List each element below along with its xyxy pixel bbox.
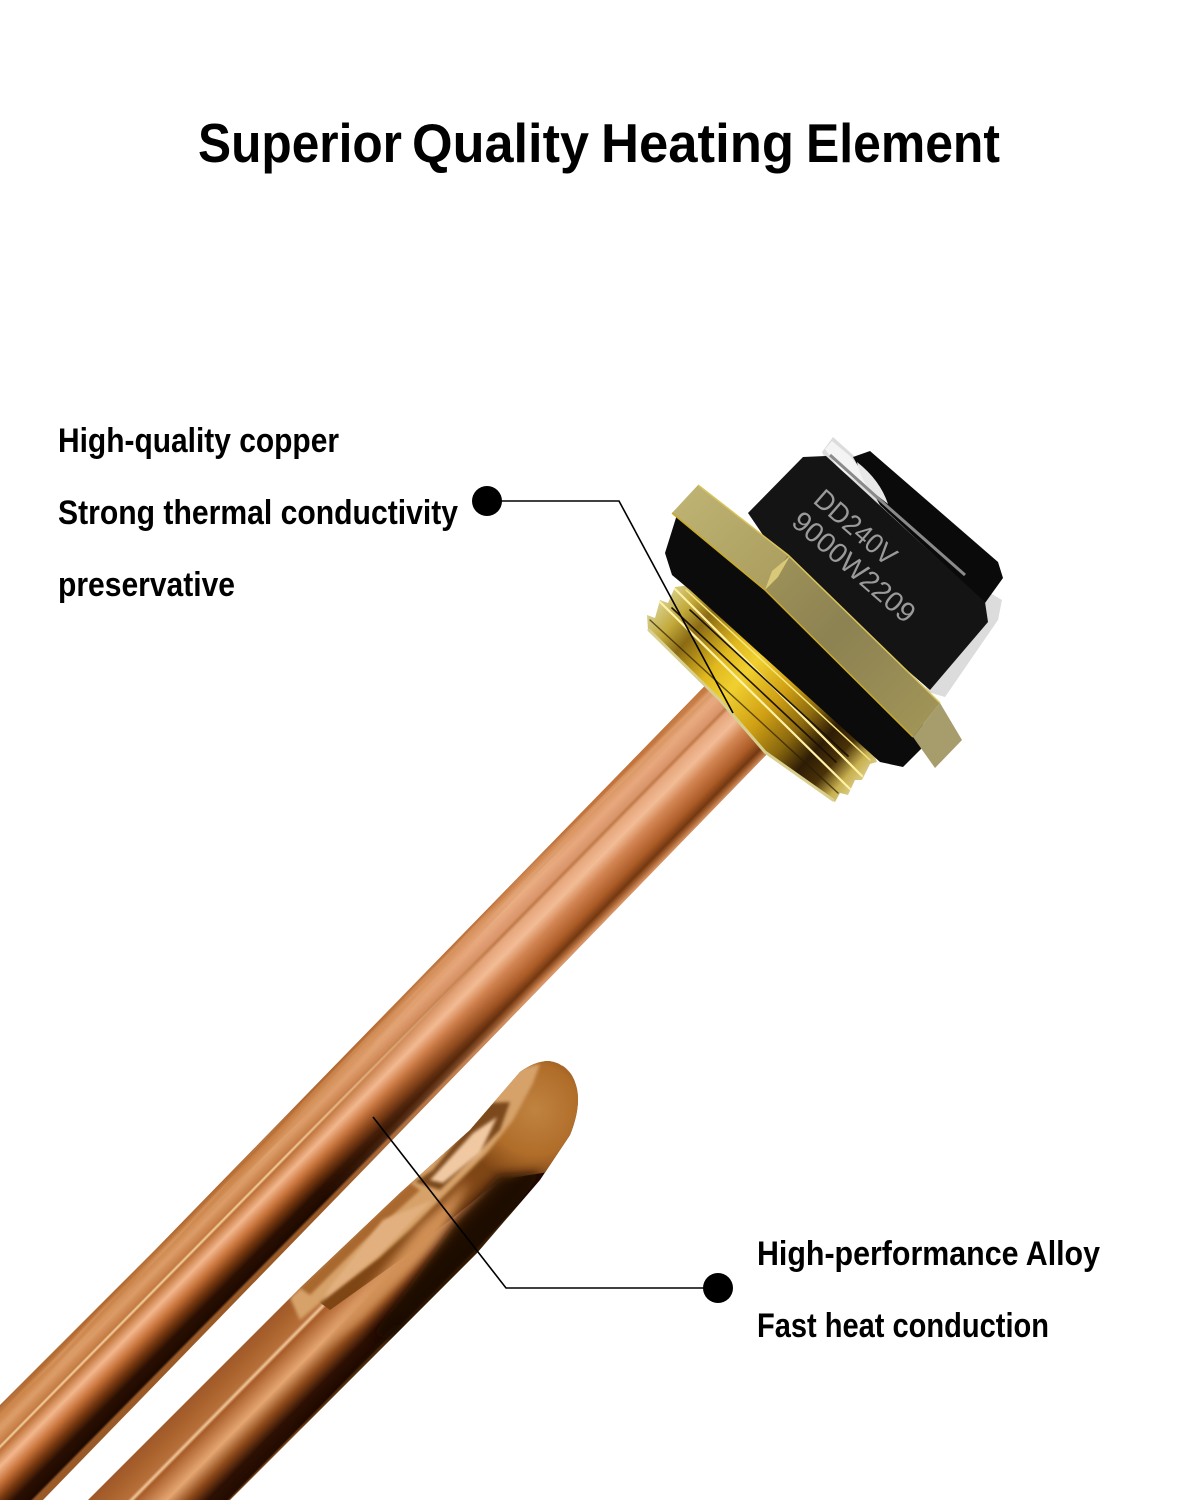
fitting: brass thread	[647, 585, 877, 802]
title	[198, 112, 1000, 174]
fitting: brass hex flange	[672, 485, 962, 768]
black housing	[748, 456, 988, 690]
copper tube: short leg with rounded tip	[88, 1061, 578, 1500]
pale highlight	[430, 1117, 497, 1183]
title: Quality	[412, 112, 589, 174]
title: Element	[806, 112, 1000, 174]
fitting: black terminal housing with silver clips: 9000W2209	[786, 505, 922, 629]
silver clip	[822, 437, 1002, 697]
callout: top leader line and dot	[472, 486, 733, 713]
window in clip	[857, 462, 888, 504]
callout: top label text: High-quality copper	[58, 422, 339, 460]
silver strip between housing and cover	[830, 455, 965, 575]
copper tube: long leg	[0, 686, 766, 1500]
black rear cover	[853, 451, 1003, 603]
callout: bottom label text: High-performance Alloy	[757, 1235, 1100, 1273]
lower light copper band	[336, 1181, 471, 1338]
title: Superior	[198, 112, 402, 174]
callout: bottom label text: Fast heat conduction	[757, 1307, 1049, 1345]
dark underside	[372, 1172, 542, 1340]
fitting: black terminal housing with silver clips	[748, 437, 1003, 697]
fitting: black rubber gasket	[665, 505, 935, 767]
callout: top label text: Strong thermal conductivity	[58, 494, 458, 532]
callout: top label text	[58, 422, 458, 604]
upper rim band	[300, 1183, 420, 1295]
housing text: DD240V	[808, 483, 903, 572]
callout: bottom label text	[757, 1235, 1100, 1345]
callout: bottom leader line and dot	[373, 1117, 733, 1303]
tip cap	[300, 1055, 590, 1310]
title: Heating	[601, 112, 794, 174]
inner dark lobe	[415, 1102, 510, 1190]
tan crescent	[290, 1064, 540, 1320]
pale band	[323, 1200, 433, 1300]
callout: top label text: preservative	[58, 566, 235, 604]
